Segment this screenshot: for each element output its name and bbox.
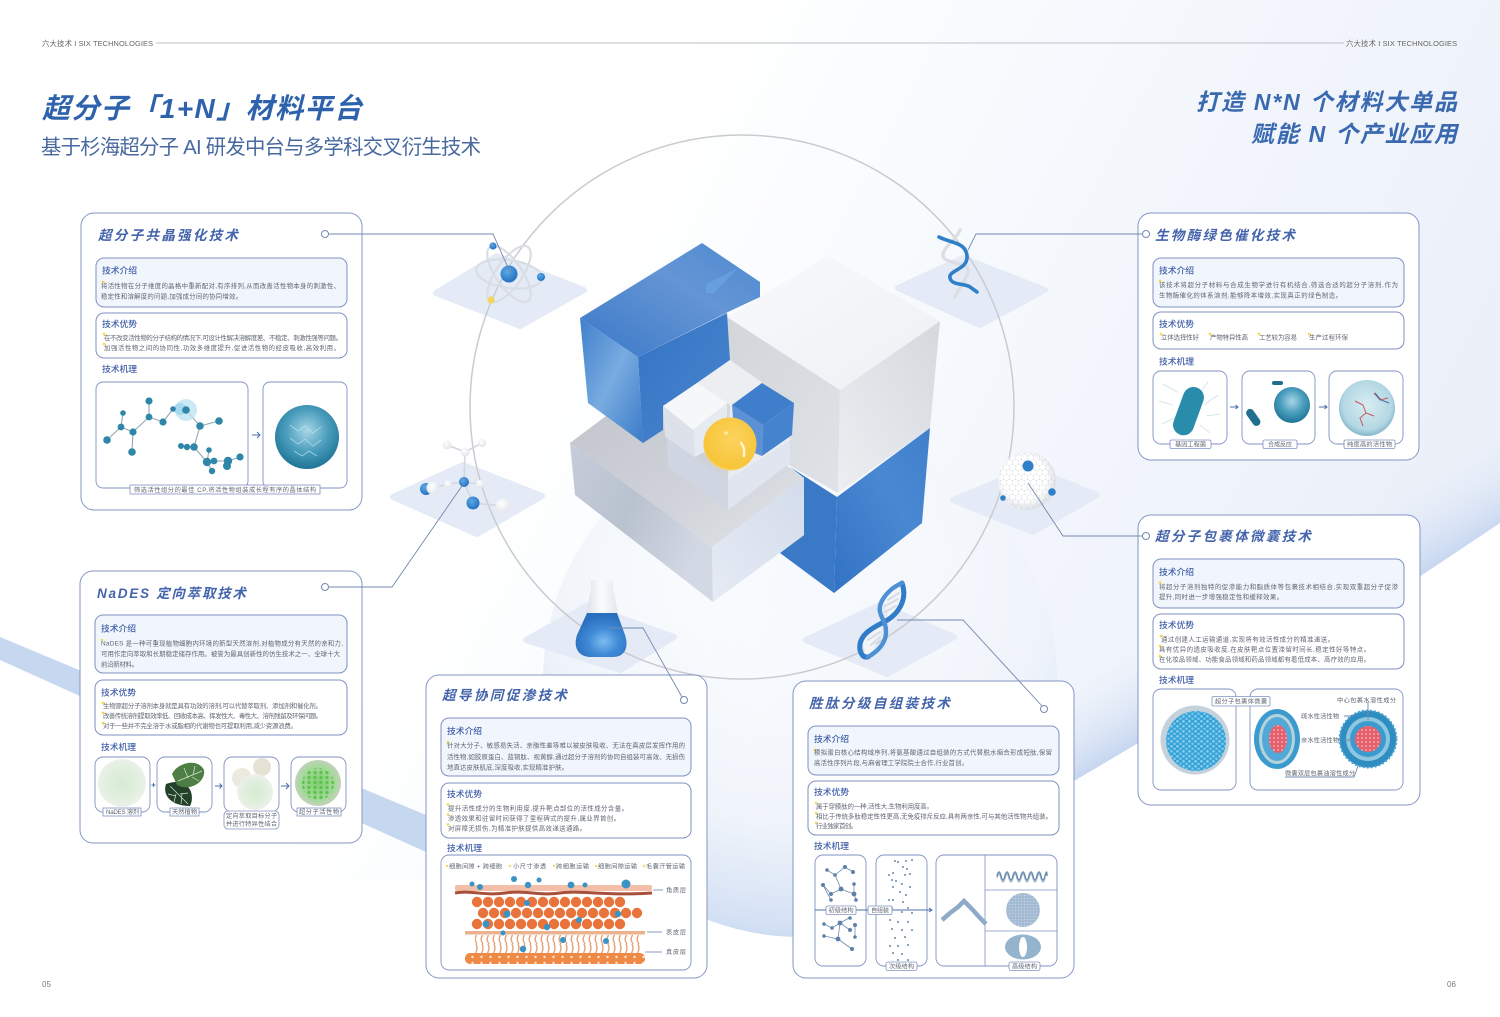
step: natural plant: 天然植物 xyxy=(172,808,197,816)
heading: 超分子共晶强化技术 xyxy=(98,228,239,243)
intro card: 将活性物在分子维度的晶格中重新配对,有序排列,从而改善活性物本身的刺激性、 xyxy=(101,281,340,290)
intro card: 技术介绍 xyxy=(1159,264,1194,276)
intro card xyxy=(1153,258,1404,307)
small cubes xyxy=(663,360,794,510)
intro card xyxy=(441,718,691,776)
advantages card: 加强活性物之间的协同性,功效多维度提升,促进活性物的经皮吸收,高效利用。 xyxy=(104,343,340,352)
slogan xyxy=(1196,89,1460,147)
step: synthesis: 合成反应 xyxy=(1268,440,1292,448)
advantages card: 渗透效果和驻留时间获得了里程碑式的提升,属业界首创。 xyxy=(448,814,620,822)
heading: NaDES 定向萃取技术 xyxy=(97,586,247,601)
mechanism heading: 技术机理 xyxy=(447,842,482,853)
connector: peptide xyxy=(897,620,1048,712)
step: targeted binding: 并进行特异性结合 xyxy=(226,820,277,828)
step: pure active: 纯度高的活性物 xyxy=(1347,440,1392,448)
advantages card: 工艺较为容易 xyxy=(1259,332,1297,342)
intro card: 地直达皮肤肌底,深度吸收,实现精准护肤。 xyxy=(447,762,568,772)
arrow xyxy=(252,432,260,438)
advantages card: 提升活性成分的生物利用度,提升靶点部位的活性成分含量。 xyxy=(448,804,628,812)
page number left: 05 xyxy=(42,980,51,989)
icon: atom xyxy=(474,240,545,308)
advantages card: 对于一些并不完全溶于水或脂相的代谢物也可提取利用,减少资源浪费。 xyxy=(103,721,297,730)
connector: NaDES xyxy=(322,483,464,590)
mechanism: primary structure xyxy=(815,855,866,966)
mechanism: skin layers diagram: 表皮层 xyxy=(666,928,686,936)
heading: 超分子包裹体微囊技术 xyxy=(1155,529,1312,544)
advantages card: 立体选择性好 xyxy=(1161,332,1200,342)
step: synthesis xyxy=(1242,371,1315,448)
label: higher: 高级结构 xyxy=(1012,962,1037,970)
mechanism: capsule cross-section xyxy=(1153,689,1236,790)
white slab xyxy=(570,374,804,602)
icon: DNA xyxy=(860,583,904,657)
heading: 胜肽分级自组装技术 xyxy=(809,696,951,711)
connector: co-crystal xyxy=(322,230,510,272)
panel: encapsulated microcapsule xyxy=(1138,515,1420,805)
advantages card: 具有优异的透皮吸收度,在皮肤靶点位置滞留时间长,稳定性好等特点。 xyxy=(1159,644,1370,653)
title: 超分子「1+N」材料平台 xyxy=(42,93,364,124)
slogan: 打造 N*N 个材料大单品 xyxy=(1196,89,1458,115)
intro card: 高活性序列片段,与麻省理工学院院士合作,行业首创。 xyxy=(814,758,968,767)
step: engineered bacterium xyxy=(1153,371,1227,448)
panel: NaDES extraction xyxy=(80,571,362,843)
mechanism: capsule layers: 疏水性活性物 xyxy=(1301,712,1339,720)
icon: sphere with spots xyxy=(998,452,1056,510)
mechanism: secondary structure xyxy=(876,855,927,966)
label: primary xyxy=(826,906,856,914)
blue lower block xyxy=(780,428,930,593)
subtitle: 基于杉海超分子 AI 研发中台与多学科交叉衍生技术 xyxy=(41,136,481,159)
slogan: 赋能 N 个产业应用 xyxy=(1251,121,1460,147)
legend: 毛囊汗管运输 xyxy=(646,862,686,870)
step: targeted binding xyxy=(224,757,279,829)
label: primary: 初级结构 xyxy=(828,906,854,914)
intro card: 针对大分子、敏感易失活、亲脂性差等难以被皮肤吸收、无法在真皮层发挥作用的 xyxy=(447,740,685,750)
advantages card xyxy=(441,783,691,838)
mechanism heading: 技术机理 xyxy=(101,741,136,752)
intro card: 模拟蛋白核心结构域序列,将氨基酸通过自组装的方式代替脱水缩合形成短肽,保留 xyxy=(814,748,1052,756)
intro card: 技术介绍 xyxy=(814,733,849,744)
intro card xyxy=(1153,559,1404,608)
label: secondary: 次级结构 xyxy=(889,962,914,970)
advantages card: 产物特异性高 xyxy=(1210,332,1248,342)
icon: flask xyxy=(576,580,626,657)
advantages card xyxy=(1153,614,1404,669)
link arrow xyxy=(815,908,932,912)
heading: 超导协同促渗技术 xyxy=(442,688,568,703)
golden ball xyxy=(704,418,756,470)
label: self-assemble xyxy=(868,906,892,914)
mechanism: crystal sphere xyxy=(263,382,347,488)
label: higher xyxy=(1009,962,1040,970)
step: active xyxy=(291,757,346,816)
intro card: 稳定性和溶解度的问题,加强成分间的协同增效。 xyxy=(101,292,242,300)
step: NaDES solvent: NaDES 溶剂 xyxy=(106,808,139,816)
mechanism: capsule layers: 微囊双层包裹油溶性成分 xyxy=(1285,770,1355,778)
intro card: 提升,同时进一步增强稳定性和缓释效果。 xyxy=(1159,592,1283,601)
step: natural plant xyxy=(157,757,212,816)
header: divider line xyxy=(156,42,1344,44)
connector: microcapsule xyxy=(1028,483,1150,540)
mechanism heading: 技术机理 xyxy=(814,840,849,851)
isometric platforms xyxy=(393,256,1097,674)
central cube composition xyxy=(570,243,940,602)
legend: 细胞间隙 + 跨细胞 xyxy=(449,862,502,870)
panel: green biocatalysis xyxy=(1138,213,1419,460)
intro card: NaDES 是一种可重现植物细胞内环境的新型天然溶剂,对植物成分有天然的亲和力, xyxy=(101,638,343,648)
step arrows xyxy=(152,783,289,789)
advantages card: 属于穿膜肽的一种,活性大,生物利用度高。 xyxy=(816,801,933,810)
legend: 小尺寸渗透 xyxy=(513,862,546,870)
caption: 筛选活性组分的最佳 CP,将活性物组装成长程有序的晶体结构 xyxy=(134,486,316,494)
step: active: 超分子活性物 xyxy=(299,808,339,816)
mechanism heading: 技术机理 xyxy=(1159,674,1194,685)
intro card: 技术介绍 xyxy=(1159,566,1194,577)
step arrows xyxy=(1230,405,1327,409)
advantages card: 技术优势 xyxy=(447,788,482,799)
panel: peptide self-assembly xyxy=(793,681,1074,978)
label: capsule xyxy=(1212,696,1270,706)
mechanism: capsule layers: 中心包裹水溶性成分 xyxy=(1337,696,1396,704)
intro card: 前沿新材料。 xyxy=(101,660,138,668)
heading: 生物酶绿色催化技术 xyxy=(1155,228,1296,243)
header: left: 六大技术 I SIX TECHNOLOGIES xyxy=(42,39,153,48)
intro card: 技术介绍 xyxy=(102,264,137,276)
intro card xyxy=(96,258,347,307)
page number right: 06 xyxy=(1447,980,1456,989)
advantages card: 对屏障无损伤,为精准护肤提供高效递送通路。 xyxy=(448,824,586,832)
mechanism: higher structure xyxy=(936,855,1057,966)
intro card: 技术介绍 xyxy=(101,622,136,634)
intro card: 该技术将超分子材料与合成生物学进行有机结合,筛选合适的超分子溶剂,作为 xyxy=(1159,280,1398,289)
advantages card: 行业独家首创。 xyxy=(816,821,857,830)
legend: 跨细胞运输 xyxy=(556,862,590,870)
step: engineered bacterium: 基因工程菌 xyxy=(1175,440,1206,448)
label: self-assemble: 自组装 xyxy=(871,906,889,914)
advantages card xyxy=(1153,312,1404,349)
legend xyxy=(446,862,686,870)
mechanism heading: 技术机理 xyxy=(102,363,137,374)
label: secondary xyxy=(886,962,917,970)
mechanism: capsule layers: 亲水性活性物 xyxy=(1301,736,1339,744)
intro card: 生物酶催化的体系溶剂,能够降本增效,实现真正的绿色制造。 xyxy=(1159,290,1342,300)
central orbit ring xyxy=(470,135,1014,679)
mechanism: skin layers diagram: 角质层 xyxy=(666,886,686,894)
mechanism: skin layers diagram: 真皮层 xyxy=(666,948,686,956)
advantages card: 技术优势 xyxy=(102,318,137,329)
advantages card: 生物源超分子溶剂本身就是具有功效的溶剂,可以代替萃取剂、添加剂和催化剂。 xyxy=(103,701,322,710)
intro card: 技术介绍 xyxy=(447,725,482,736)
blue upper block xyxy=(580,243,760,443)
advantages card xyxy=(808,781,1059,835)
connector: biocatalysis xyxy=(968,230,1150,250)
intro card xyxy=(808,726,1059,775)
advantages card: 技术优势 xyxy=(814,786,849,797)
advantages card: 改善传统溶剂提取效率低、回收成本高、挥发性大、毒性大、溶剂残留及环保问题。 xyxy=(103,711,322,720)
advantages card: 在化妆品领域、功能食品领域和药品领域都有着低成本、高疗效的应用。 xyxy=(1159,654,1370,663)
connector: permeation xyxy=(607,628,688,704)
intro card: 可用作定向萃取和长期稳定储存作用。被誉为最具创新性的仿生技术之一、全球十大 xyxy=(101,649,341,658)
advantages card: 在不改变活性物的分子结构的情况下,可设计性解决溶解度差、不稳定、刺激性强等问题。 xyxy=(104,333,342,342)
advantages card: 技术优势 xyxy=(101,686,136,698)
step: NaDES solvent xyxy=(95,757,150,816)
panel: synergistic permeation xyxy=(426,675,707,978)
icon: molecule xyxy=(420,439,510,514)
label: capsule: 超分子包裹体微囊 xyxy=(1215,698,1267,706)
advantages card xyxy=(96,313,347,358)
advantages card: 技术优势 xyxy=(1159,619,1194,630)
panel: co-crystal enhancement xyxy=(81,213,362,510)
header: right: 六大技术 I SIX TECHNOLOGIES xyxy=(1346,39,1457,48)
advantages card: 生产过程环保 xyxy=(1309,332,1349,342)
advantages card: 相比于传统多肽稳定性性更高,无免疫排斥反应,具有两亲性,可与其他活性物共组装。 xyxy=(816,811,1052,820)
white big cube xyxy=(727,256,940,493)
step: targeted binding: 定向萃取目标分子 xyxy=(226,812,277,820)
step: pure active xyxy=(1329,371,1403,448)
intro card: 将超分子溶剂独特的促渗能力和脂质体等包裹技术相结合,实现双重超分子促渗 xyxy=(1159,582,1399,591)
advantages card: 通过创建人工运输通道,实现将有效活性成分的精准递送。 xyxy=(1161,634,1334,643)
intro card: 活性物,如胶原蛋白、蓝铜肽、视黄醇,通过超分子溶剂的协同自组装可高效、无损伤 xyxy=(447,752,685,761)
legend: 细胞间隙运输 xyxy=(598,862,638,870)
icon: helix strand xyxy=(939,230,977,297)
intro card xyxy=(95,615,347,673)
mechanism heading: 技术机理 xyxy=(1159,356,1194,366)
advantages card xyxy=(95,680,347,735)
mechanism: capsule layers xyxy=(1250,689,1403,790)
mechanism: skin layers diagram xyxy=(441,855,691,970)
advantages card: 技术优势 xyxy=(1159,318,1194,329)
mechanism: molecule diagram xyxy=(96,382,248,488)
